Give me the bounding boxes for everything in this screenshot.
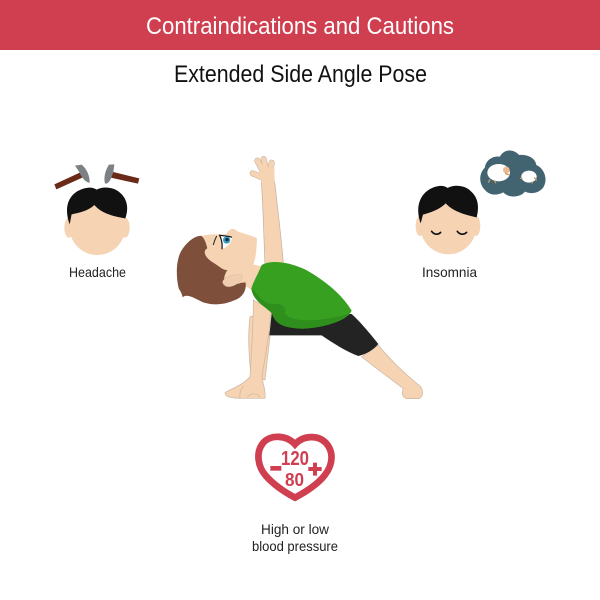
ear: [223, 275, 242, 287]
eye: [213, 235, 232, 249]
insomnia icon: [416, 151, 546, 280]
hair: [67, 187, 127, 224]
face: [69, 198, 125, 255]
green shirt: [251, 262, 352, 329]
thought cloud with sheep: [480, 151, 546, 196]
insomnia label: Insomnia: [422, 264, 477, 280]
minus sign: [270, 466, 281, 471]
blood pressure label: [252, 521, 338, 554]
raised arm and hand: [253, 159, 283, 265]
diastolic value: 80: [285, 470, 304, 490]
blood pressure label: blood pressure: [252, 538, 338, 554]
ears: [64, 218, 74, 238]
closed eyes: [432, 231, 467, 234]
left hammer: [54, 165, 90, 189]
face: [420, 198, 476, 254]
back leg: [362, 345, 423, 399]
systolic value: 120: [281, 448, 309, 470]
hair: [177, 236, 246, 304]
headache icon: [54, 164, 139, 280]
sheep one: [487, 164, 510, 183]
right hammer: [104, 164, 139, 184]
headache label: Headache: [69, 264, 126, 280]
header band: Contraindications and Cautions: [146, 13, 454, 40]
supporting arm and hand: [225, 300, 271, 398]
ears: [416, 216, 424, 236]
plus sign: [308, 463, 322, 476]
black shorts: [269, 313, 378, 356]
shirt shadow: [251, 288, 349, 329]
blood pressure icon: [252, 437, 338, 554]
heart outline: [258, 437, 332, 498]
yoga figure: [177, 159, 423, 399]
blood pressure label: High or low: [261, 521, 330, 537]
hair: [418, 186, 478, 223]
header band: [0, 0, 600, 50]
sheep two: [520, 171, 537, 183]
face: [202, 229, 257, 284]
neck: [238, 262, 263, 290]
back arm: [249, 313, 270, 380]
subtitle: Extended Side Angle Pose: [174, 61, 427, 88]
